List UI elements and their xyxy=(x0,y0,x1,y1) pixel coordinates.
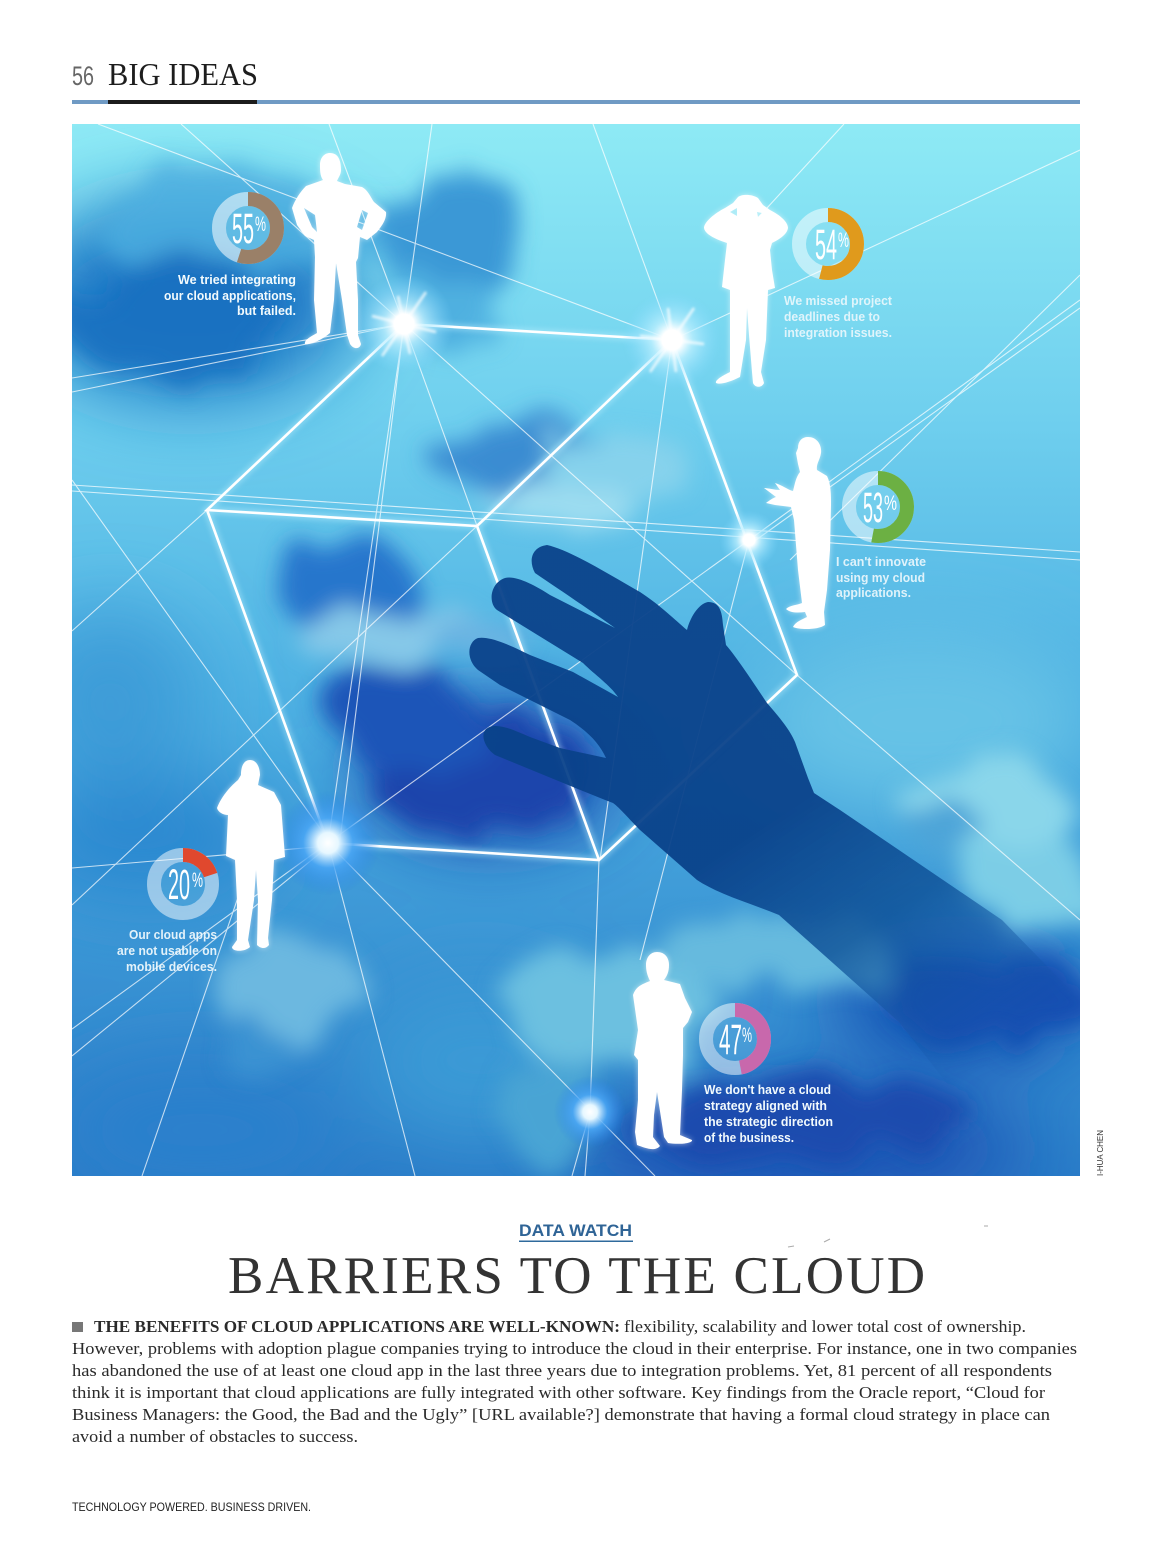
caption: 20 percent: mobile devices. xyxy=(126,960,217,974)
body paragraph: Business Managers: the Good, the Bad and the Ugly” [URL available?] demonstrate that having a formal cloud strategy in place can xyxy=(72,1405,1051,1424)
body paragraph: has abandoned the use of at least one cloud app in the last three years due to integration problems. Yet, 81 percent of all respondents xyxy=(72,1361,1052,1380)
donut chart: 47 percent xyxy=(706,1010,764,1068)
donut chart: 47 percent: % xyxy=(742,1024,752,1047)
figure: on the phone xyxy=(217,760,285,951)
donut chart: 55 percent: 55 xyxy=(232,205,254,253)
caption: 55 percent xyxy=(164,274,296,315)
body paragraph: avoid a number of obstacles to success. xyxy=(72,1427,358,1446)
caption: 55 percent: but failed. xyxy=(237,304,296,318)
caption: 53 percent xyxy=(836,555,926,600)
page number: 56 xyxy=(72,61,94,91)
donut chart: 54 percent: % xyxy=(838,229,849,252)
headline: BARRIERS TO THE CLOUD xyxy=(228,1247,925,1305)
body paragraph: flexibility, scalability and lower total cost of ownership. xyxy=(624,1317,1026,1336)
donut chart: 55 percent: % xyxy=(255,213,266,236)
figure: arms crossed xyxy=(633,952,692,1149)
wireframe cube xyxy=(207,324,797,860)
figure: gesturing side view xyxy=(764,437,831,629)
donut chart: 47 percent: 47 xyxy=(719,1016,742,1064)
body paragraph: think it is important that cloud applications are fully integrated with other software. Key findings from the Oracle report, “Cloud for xyxy=(72,1383,1045,1402)
caption: 55 percent: our cloud applications, xyxy=(164,289,296,303)
donut chart: 53 percent: 53 xyxy=(863,484,883,532)
illustrator credit: I-HUA CHEN xyxy=(1096,1130,1105,1176)
caption: 47 percent: the strategic direction xyxy=(704,1115,833,1129)
caption: 53 percent: applications. xyxy=(836,586,911,600)
hand silhouette xyxy=(469,545,1037,1036)
page header xyxy=(72,56,1080,104)
donut chart: 54 percent: 54 xyxy=(815,221,837,269)
caption: 53 percent: using my cloud xyxy=(836,571,925,585)
light nodes xyxy=(276,274,779,1148)
caption: 47 percent xyxy=(704,1083,833,1145)
panel: cloud illustration xyxy=(20,124,1090,1200)
kicker: data watch: DATA WATCH xyxy=(519,1222,632,1240)
bullet square xyxy=(72,1322,83,1332)
body paragraph: However, problems with adoption plague companies trying to introduce the cloud in their enterprise. For instance, one in two companies xyxy=(72,1339,1077,1358)
donut chart: 54 percent xyxy=(799,215,857,273)
section title: BIG IDEAS xyxy=(108,56,258,92)
figure: hands on head xyxy=(704,195,788,387)
caption: 54 percent xyxy=(784,294,893,340)
donut chart: 53 percent: % xyxy=(884,492,897,515)
thin connecting lines xyxy=(72,124,1080,1176)
body paragraph xyxy=(72,1317,1077,1446)
caption: 47 percent: We don't have a cloud xyxy=(704,1083,831,1097)
caption: 54 percent: deadlines due to xyxy=(784,310,880,324)
donut chart: 20 percent xyxy=(154,855,212,913)
sky and clouds background xyxy=(20,124,1090,1200)
figure: hands on hips xyxy=(292,153,386,348)
donut chart: 53 percent xyxy=(849,478,907,536)
caption: 47 percent: strategy aligned with xyxy=(704,1099,827,1113)
body paragraph: THE BENEFITS OF CLOUD APPLICATIONS ARE WELL-KNOWN: xyxy=(94,1317,620,1336)
donut chart: 55 percent xyxy=(219,199,277,257)
caption: 20 percent xyxy=(117,928,217,974)
header rule xyxy=(72,100,1080,104)
caption: 53 percent: I can't innovate xyxy=(836,555,926,569)
caption: 47 percent: of the business. xyxy=(704,1131,794,1145)
donut chart: 20 percent: 20 xyxy=(168,861,190,909)
caption: 55 percent: We tried integrating xyxy=(178,273,296,287)
donut chart: 20 percent: % xyxy=(192,869,203,892)
caption: 54 percent: integration issues. xyxy=(784,326,892,340)
caption: 20 percent: Our cloud apps xyxy=(129,928,217,942)
caption: 20 percent: are not usable on xyxy=(117,944,217,958)
caption: 54 percent: We missed project xyxy=(784,294,893,308)
footer tagline: TECHNOLOGY POWERED. BUSINESS DRIVEN. xyxy=(72,1500,311,1514)
